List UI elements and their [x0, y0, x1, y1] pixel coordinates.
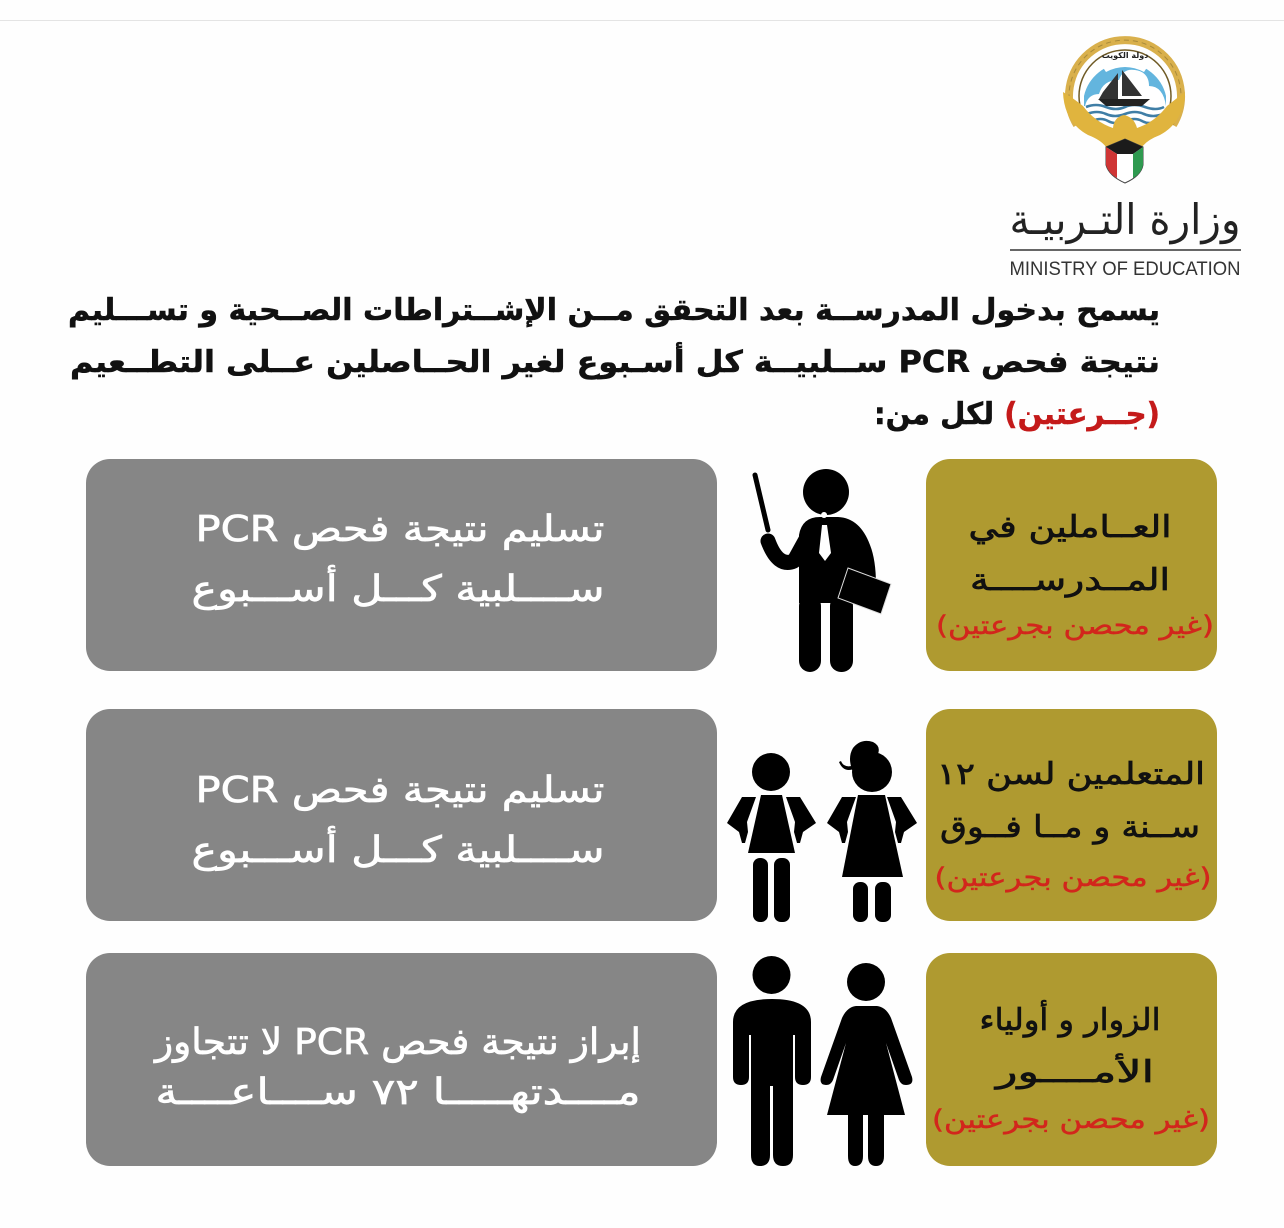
- panel: school workers: [926, 459, 1217, 671]
- icon: teacher with pointer: [755, 469, 891, 672]
- panel: row 2 requirement: [86, 709, 717, 921]
- panel: row 2 requirement: تسليم نتيجة فحص PCR: [196, 770, 604, 811]
- icon: Kuwait emblem: [1063, 40, 1185, 183]
- heading: نتيجة فحص PCR ســلبيــة كل أسـبوع لغير الحــاصلين عــلى التطــعيم: [70, 342, 1160, 380]
- icon: Kuwait emblem: دولة الكويت: [1102, 51, 1148, 60]
- panel: visitors and parents: [926, 953, 1217, 1166]
- panel: students aged 12 and over: [926, 709, 1217, 921]
- logo: Ministry of Education: [1010, 40, 1241, 280]
- icon: boy and girl with backpacks: [727, 741, 917, 922]
- heading: [68, 293, 1160, 432]
- panel: visitors and parents: الأمــــور: [993, 1052, 1154, 1090]
- icon: man and woman: [733, 956, 912, 1166]
- panel: students aged 12 and over: (غير محصن بجرعتين): [934, 863, 1212, 893]
- logo English wordmark: MINISTRY OF EDUCATION: [1010, 259, 1240, 280]
- panel: visitors and parents: (غير محصن بجرعتين): [932, 1105, 1210, 1135]
- panel: visitors and parents: الزوار و أولياء: [980, 999, 1160, 1038]
- panel: row 3 requirement: إبراز نتيجة فحص PCR لا تتجاوز: [153, 1022, 641, 1063]
- panel: school workers: المــدرســــة: [970, 563, 1170, 598]
- panel: row 3 requirement: مــــدتهـــــا ٧٢ ســــاعــــة: [155, 1072, 640, 1113]
- panel: school workers: العــاملين في: [968, 510, 1172, 545]
- panel: school workers: (غير محصن بجرعتين): [936, 611, 1214, 641]
- heading: يسمح بدخول المدرســة بعد التحقق مــن الإشــتراطات الصــحية و تســـليم: [68, 293, 1160, 328]
- panel: students aged 12 and over: ســنة و مــا فــوق: [940, 810, 1200, 845]
- panel: row 1 requirement: [86, 459, 717, 671]
- logo Arabic wordmark: وزارة التـربيـة: [1010, 195, 1240, 244]
- panel: row 3 requirement: [86, 953, 717, 1166]
- panel: students aged 12 and over: المتعلمين لسن ١٢: [937, 757, 1205, 792]
- panel: row 1 requirement: ســــلبية كـــل أســـبوع: [192, 565, 604, 610]
- panel: row 1 requirement: تسليم نتيجة فحص PCR: [196, 509, 604, 550]
- heading: (جــرعتين) لكل من:: [874, 397, 1160, 432]
- panel: row 2 requirement: ســــلبية كـــل أســـبوع: [192, 826, 604, 871]
